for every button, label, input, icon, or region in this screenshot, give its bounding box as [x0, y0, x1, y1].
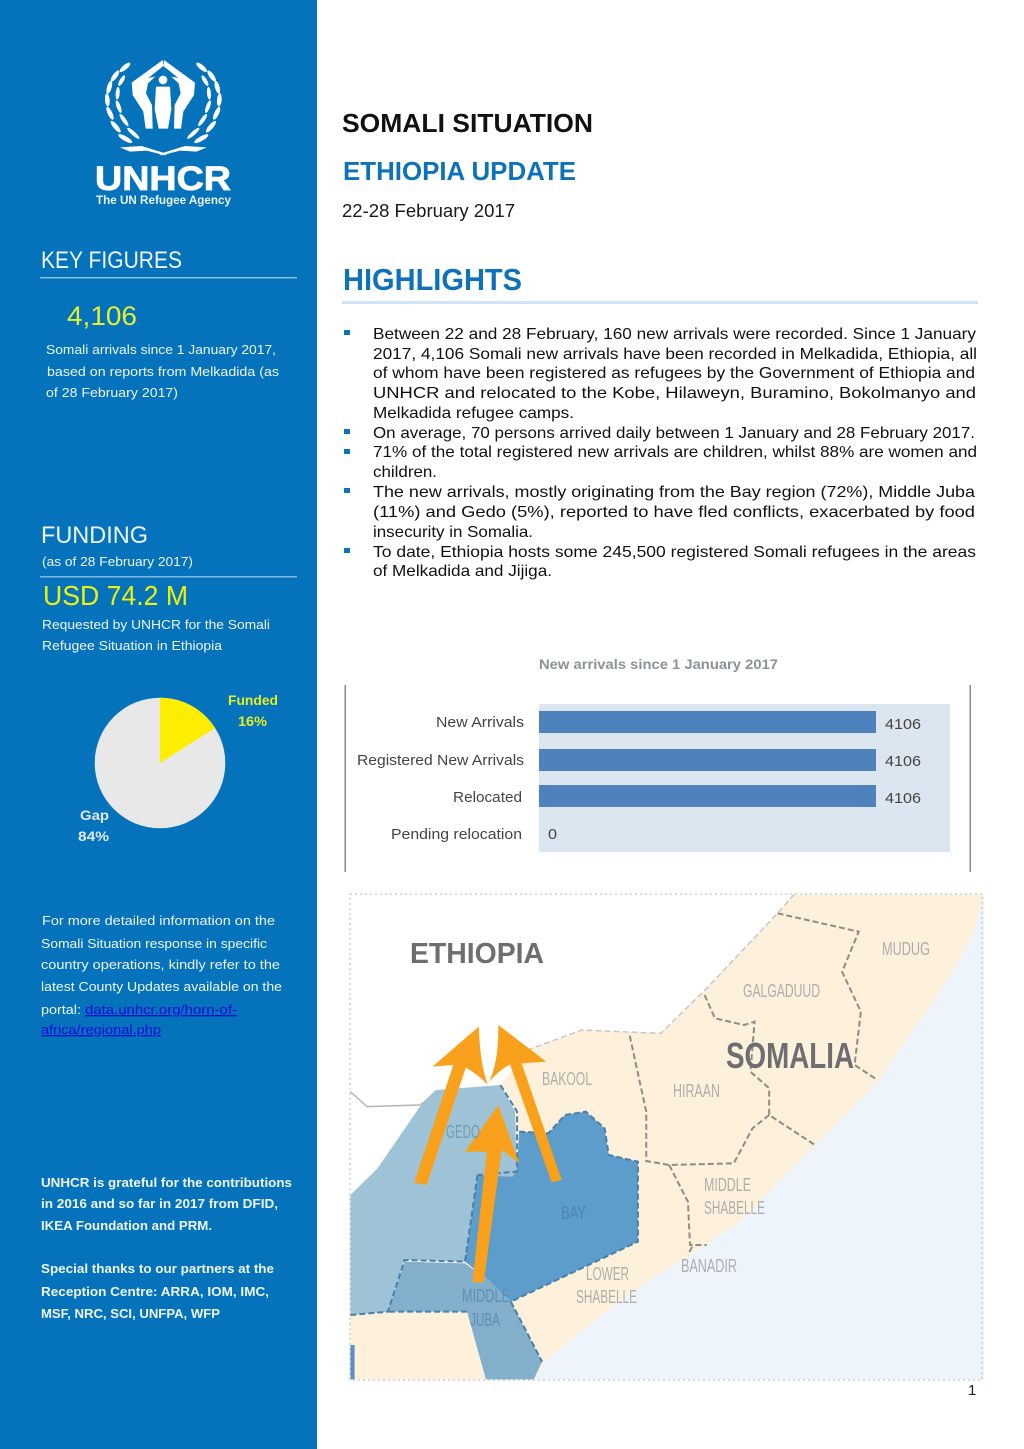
text block: highlights bullets: The new arrivals, mostly originating from the Bay region (72%), Middle Juba: [373, 484, 975, 501]
icon: UNHCR logo: [95, 60, 231, 207]
map region labels: MIDDLE: [704, 1175, 751, 1195]
map label: Somalia: SOMALIA: [726, 1035, 854, 1076]
text block: highlights bullets: insecurity in Somalia.: [373, 524, 533, 541]
icon: UNHCR logo: UNHCR: [95, 160, 231, 198]
bar: registered new arrivals: 4106: [885, 753, 921, 770]
pie label: gap: Gap: [80, 807, 109, 823]
text block: partner thanks: MSF, NRC, SCI, UNFPA, WFP: [41, 1306, 220, 1321]
text block: highlights bullets: UNHCR and relocated to the Kobe, Hilaweyn, Buramino, Bokolmanyo and: [373, 385, 976, 402]
text block: more information with portal link: [41, 913, 282, 1037]
bar: new arrivals: [436, 711, 921, 733]
arrow: centre: [465, 1105, 519, 1282]
panel: blue sidebar: [0, 0, 317, 1449]
text block: highlights bullets: of Melkadida and Jijiga.: [373, 563, 552, 580]
heading: funding: (as of 28 February 2017): [42, 554, 193, 569]
bar: relocated: 4106: [885, 790, 921, 807]
pie chart: funded vs gap: [78, 692, 278, 844]
pie label: funded: [228, 692, 278, 729]
text block: key figure caption: based on reports from Melkadida (as: [47, 364, 280, 379]
text block: highlights bullets: On average, 70 persons arrived daily between 1 January and 28 February 2017.: [373, 425, 975, 442]
map: Somalia to Ethiopia arrivals: [350, 894, 984, 1380]
text block: highlights bullets: 71% of the total registered new arrivals are children, whilst 88% are women and: [373, 444, 977, 461]
bar: new arrivals: 4106: [885, 716, 921, 733]
text block: highlights bullets: Between 22 and 28 February, 160 new arrivals were recorded. Since 1 January: [373, 326, 976, 343]
map region labels: SHABELLE: [576, 1287, 637, 1307]
subtitle: ETHIOPIA UPDATE: [343, 156, 576, 186]
map region labels: GALGADUUD: [743, 981, 820, 1001]
icon: UNHCR logo: The UN Refugee Agency: [96, 193, 231, 207]
bar: relocated: [453, 785, 921, 807]
text block: more information with portal link: For more detailed information on the: [42, 913, 275, 928]
text block: more information with portal link: data.unhcr.org/horn-of-: [85, 1002, 237, 1017]
pie label: funded: 16%: [238, 713, 268, 729]
map region labels: SHABELLE: [704, 1198, 765, 1218]
bar: new arrivals: New Arrivals: [436, 714, 524, 731]
pie label: funded: Funded: [228, 692, 278, 708]
text block: partner thanks: Reception Centre: ARRA, IOM, IMC,: [41, 1284, 269, 1299]
arrow: left: [414, 1027, 488, 1185]
text block: highlights bullets: Melkadida refugee camps.: [373, 405, 574, 422]
heading: key figures: KEY FIGURES: [41, 247, 182, 274]
bar: registered new arrivals: [357, 749, 921, 771]
text block: contributions: IKEA Foundation and PRM.: [41, 1218, 212, 1233]
text block: more information with portal link: africa/regional.php: [41, 1022, 161, 1037]
text block: more information with portal link: portal:: [41, 1002, 81, 1017]
map region labels: BAY: [561, 1203, 586, 1223]
heading: highlights: [342, 262, 978, 304]
map region labels: MUDUG: [882, 939, 930, 959]
text block: key figure caption: Somali arrivals since 1 January 2017,: [46, 342, 276, 357]
pie label: gap: [78, 807, 110, 844]
text block: more information with portal link: Somali Situation response in specific: [41, 936, 268, 951]
heading: highlights: HIGHLIGHTS: [343, 262, 522, 297]
text block: highlights bullets: of whom have been registered as refugees by the Government of Ethiopia and: [373, 365, 975, 382]
text block: funding caption: [42, 617, 270, 653]
arrow: right: [489, 1025, 562, 1182]
text block: contributions: UNHCR is grateful for the contributions: [41, 1175, 292, 1190]
text block: partner thanks: Special thanks to our partners at the: [41, 1261, 274, 1276]
date: 22-28 February 2017: [342, 201, 515, 221]
map region labels: [446, 939, 930, 1330]
map region labels: GEDO: [446, 1122, 480, 1142]
text block: highlights bullets: children.: [373, 464, 437, 481]
bar: pending relocation: 0: [548, 826, 557, 843]
chart title: New arrivals since 1 January 2017: [539, 656, 778, 672]
text block: more information with portal link: country operations, kindly refer to the: [41, 957, 280, 972]
text block: key figure caption: of 28 February 2017): [46, 385, 178, 400]
title: SOMALI SITUATION: [342, 108, 593, 138]
heading: funding: FUNDING: [41, 522, 148, 549]
bar: relocated: Relocated: [453, 789, 522, 806]
bar chart: new arrivals: [344, 656, 971, 872]
text block: funding caption: Requested by UNHCR for the Somali: [42, 617, 270, 632]
text block: contributions: in 2016 and so far in 2017 from DFID,: [41, 1196, 278, 1211]
text block: more information with portal link: latest County Updates available on the: [41, 979, 282, 994]
map region labels: MIDDLE: [462, 1286, 510, 1306]
text block: contributions: [41, 1175, 292, 1233]
text block: highlights bullets: (11%) and Gedo (5%), reported to have fled conflicts, exacerbated by food: [373, 504, 975, 521]
map region labels: LOWER: [586, 1264, 629, 1284]
heading: funding: [40, 522, 297, 578]
bar: pending relocation: Pending relocation: [391, 826, 522, 843]
map region labels: JUBA: [470, 1310, 500, 1330]
text block: partner thanks: [41, 1261, 274, 1321]
text block: highlights bullets: [344, 326, 977, 580]
map label: Ethiopia: ETHIOPIA: [410, 938, 544, 970]
text block: funding caption: Refugee Situation in Ethiopia: [42, 638, 223, 653]
map region labels: HIRAAN: [673, 1081, 720, 1101]
text block: highlights bullets: To date, Ethiopia hosts some 245,500 registered Somali refugees in the areas: [373, 544, 976, 561]
text block: highlights bullets: 2017, 4,106 Somali new arrivals have been recorded in Melkadida, Ethiopia, all: [373, 346, 977, 363]
map region labels: BANADIR: [681, 1256, 737, 1276]
map region labels: BAKOOL: [542, 1069, 592, 1089]
key figure: 4,106: 4,106: [67, 301, 137, 331]
funding amount: USD 74.2 M: [43, 580, 188, 611]
pie label: gap: 84%: [78, 828, 110, 844]
text block: key figure caption: [46, 342, 280, 400]
bar: registered new arrivals: Registered New Arrivals: [357, 752, 524, 769]
page number: 1: [968, 1382, 976, 1399]
